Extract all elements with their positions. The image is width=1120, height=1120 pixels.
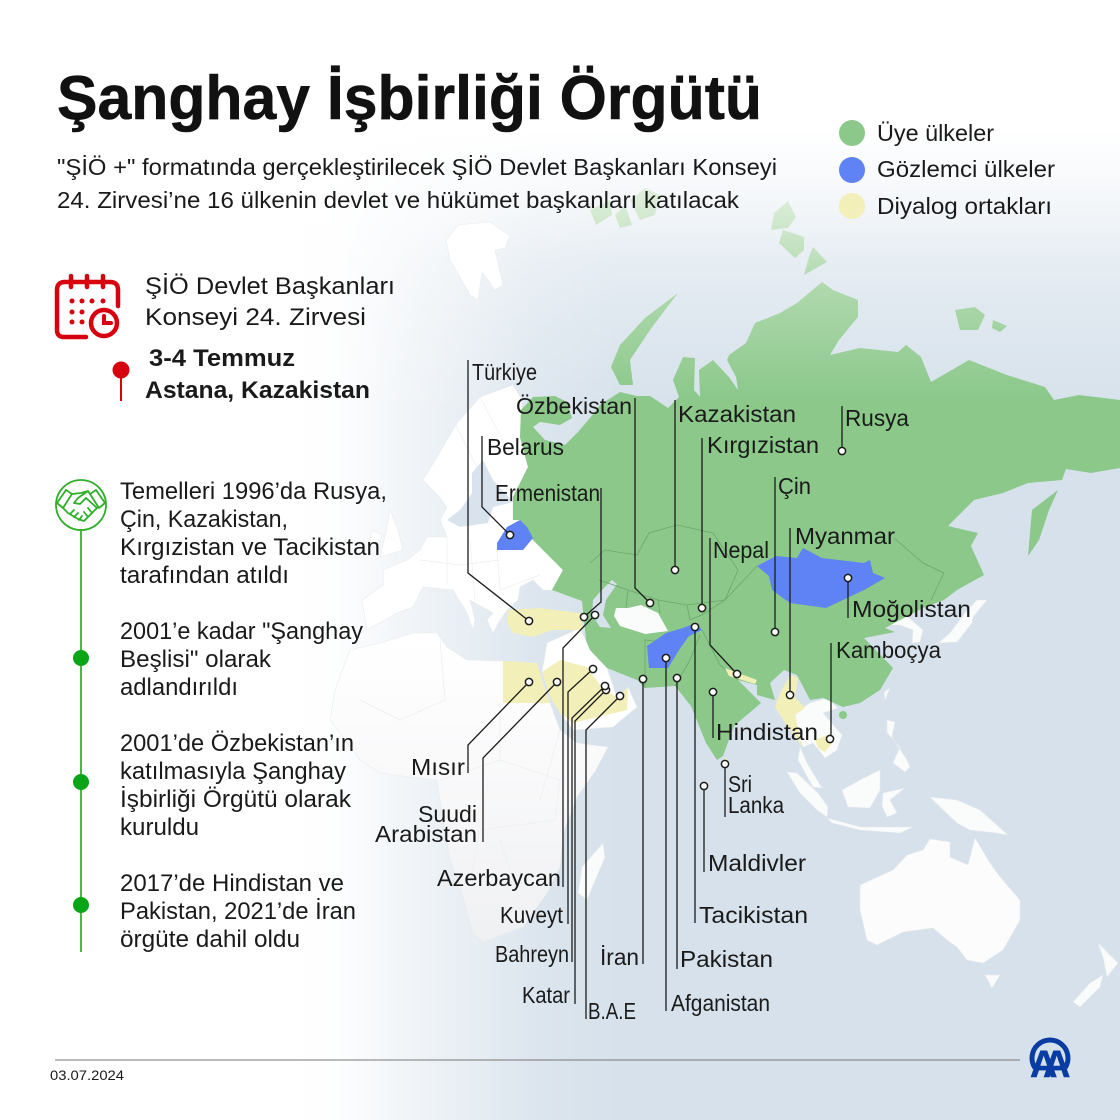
white land borders <box>360 397 560 900</box>
label: Katar <box>522 686 610 1008</box>
label: Belarus: Belarus <box>487 434 564 460</box>
label: Moğolistan <box>844 574 971 622</box>
label: Kırgızistan <box>698 432 819 612</box>
logo: AA: AA <box>1030 1044 1070 1086</box>
text: founded 2001: katılmasıyla Şanghay <box>120 758 346 785</box>
summit date and place: Astana, Kazakistan <box>145 377 370 404</box>
label: İran <box>600 675 647 970</box>
label: Çin: Çin <box>778 473 811 499</box>
label: Moğolistan: Moğolistan <box>852 596 971 622</box>
legend: observer countries: Gözlemci ülkeler <box>877 156 1055 182</box>
text: foundation 1996: Kırgızistan ve Tacikistan <box>120 534 380 561</box>
footer rule <box>55 1059 1020 1061</box>
label: Kırgızistan: Kırgızistan <box>707 432 819 458</box>
yellow dialogue partner countries <box>503 608 833 768</box>
text: Shanghai Five: adlandırıldı <box>120 674 238 701</box>
text: 2017 and 2021 members: Pakistan, 2021’de İran <box>120 898 356 925</box>
label: Özbekistan <box>516 393 654 607</box>
text: founded 2001: İşbirliği Örgütü olarak <box>120 786 352 813</box>
label: Mısır: Mısır <box>411 754 465 780</box>
label: Bahreyn <box>495 682 609 967</box>
label: Tacikistan: Tacikistan <box>699 902 808 928</box>
label: Myanmar <box>786 523 895 699</box>
label: Myanmar: Myanmar <box>795 523 895 549</box>
green member countries <box>513 188 1120 760</box>
legend: dialogue partners: Diyalog ortakları <box>877 193 1052 219</box>
label: Hindistan: Hindistan <box>716 719 818 745</box>
text: 2017 and 2021 members <box>120 870 356 953</box>
legend <box>839 120 1055 219</box>
summit date and place <box>145 345 370 404</box>
label: Afganistan: Afganistan <box>671 990 770 1016</box>
timeline dot 2001 <box>73 650 89 666</box>
icon: calendar with clock <box>57 276 118 337</box>
subtitle: "ŞİÖ +" formatında gerçekleştirilecek ŞİÖ Devlet Başkanları Konseyi <box>57 154 777 180</box>
label: Kuveyt: Kuveyt <box>500 902 564 928</box>
label: Kazakistan: Kazakistan <box>678 401 796 427</box>
text: Shanghai Five <box>120 618 363 701</box>
label: Ermenistan: Ermenistan <box>495 480 600 506</box>
icon: location pin <box>112 362 130 401</box>
label: Suudi Arabistan: Suudi <box>418 801 477 827</box>
text: 2017 and 2021 members: örgüte dahil oldu <box>120 926 300 953</box>
subtitle <box>57 154 777 213</box>
label: B.A.E: B.A.E <box>588 998 636 1024</box>
label: Azerbaycan: Azerbaycan <box>437 865 561 891</box>
label: Sri Lanka: Sri <box>728 771 752 797</box>
label: Rusya: Rusya <box>845 405 909 431</box>
label: Belarus <box>482 434 564 539</box>
label: Azerbaycan <box>437 611 599 891</box>
label: Türkiye: Türkiye <box>472 359 537 385</box>
label: Hindistan <box>709 688 818 745</box>
label: Pakistan <box>673 674 773 972</box>
label: Tacikistan <box>691 623 808 928</box>
summit heading: ŞİÖ Devlet Başkanları <box>145 273 395 300</box>
label: Maldivler: Maldivler <box>708 850 806 876</box>
label: Kuveyt <box>500 665 597 928</box>
label: Ermenistan <box>495 480 601 621</box>
summit heading <box>145 273 395 331</box>
label: Özbekistan: Özbekistan <box>516 393 632 419</box>
text: founded 2001: 2001’de Özbekistan’ın <box>120 730 354 757</box>
title: Şanghay İşbirliği Örgütü <box>57 64 762 133</box>
label: Pakistan: Pakistan <box>680 946 773 972</box>
text: founded 2001: kuruldu <box>120 814 199 841</box>
label: Çin <box>771 473 811 636</box>
timeline dot 2017 <box>73 897 89 913</box>
icon: handshake <box>56 480 106 530</box>
label: Mısır <box>411 678 533 780</box>
label: Sri Lanka <box>721 760 784 818</box>
label: Rusya <box>838 405 909 455</box>
map <box>330 188 1120 1007</box>
green internal borders <box>590 525 944 688</box>
Caspian Sea <box>592 580 617 628</box>
label: Kamboçya <box>826 637 941 743</box>
summit heading: Konseyi 24. Zirvesi <box>145 304 366 331</box>
timeline dot 2001 Uzbekistan <box>73 774 89 790</box>
label: Kazakistan <box>671 400 796 574</box>
legend: member countries: Üye ülkeler <box>877 120 994 146</box>
timeline <box>56 480 106 952</box>
label: Afganistan <box>662 654 770 1016</box>
label: Maldivler <box>700 782 806 876</box>
text: Shanghai Five: 2001’e kadar "Şanghay <box>120 618 363 645</box>
label: Nepal: Nepal <box>713 537 769 563</box>
label: Suudi Arabistan: Arabistan <box>375 821 477 847</box>
Baltic Sea <box>447 460 513 527</box>
label: Suudi Arabistan <box>375 678 561 847</box>
subtitle: 24. Zirvesi’ne 16 ülkenin devlet ve hükümet başkanları katılacak <box>57 187 740 213</box>
Turkmenistan <box>614 605 668 634</box>
label: Türkiye <box>468 359 537 625</box>
text: foundation 1996 <box>120 478 387 589</box>
label: B.A.E <box>586 692 636 1024</box>
label: Sri Lanka: Lanka <box>728 792 784 818</box>
label: Kamboçya: Kamboçya <box>836 637 941 663</box>
white land: Europe, Africa, Arabia, East Asia, Oceania <box>330 222 1118 1007</box>
blue observer countries <box>497 520 885 668</box>
date: 03.07.2024 <box>50 1067 124 1083</box>
text: foundation 1996: Temelleri 1996’da Rusya, <box>120 478 387 505</box>
label: Bahreyn: Bahreyn <box>495 941 569 967</box>
text: foundation 1996: tarafından atıldı <box>120 562 289 589</box>
label: Nepal <box>710 537 769 678</box>
label: Katar: Katar <box>522 982 570 1008</box>
text: 2017 and 2021 members: 2017’de Hindistan ve <box>120 870 344 897</box>
text: Shanghai Five: Beşlisi" olarak <box>120 646 272 673</box>
text: founded 2001 <box>120 730 354 841</box>
summit date and place: 3-4 Temmuz <box>149 345 295 372</box>
text: foundation 1996: Çin, Kazakistan, <box>120 506 288 533</box>
label: İran: İran <box>600 944 639 970</box>
